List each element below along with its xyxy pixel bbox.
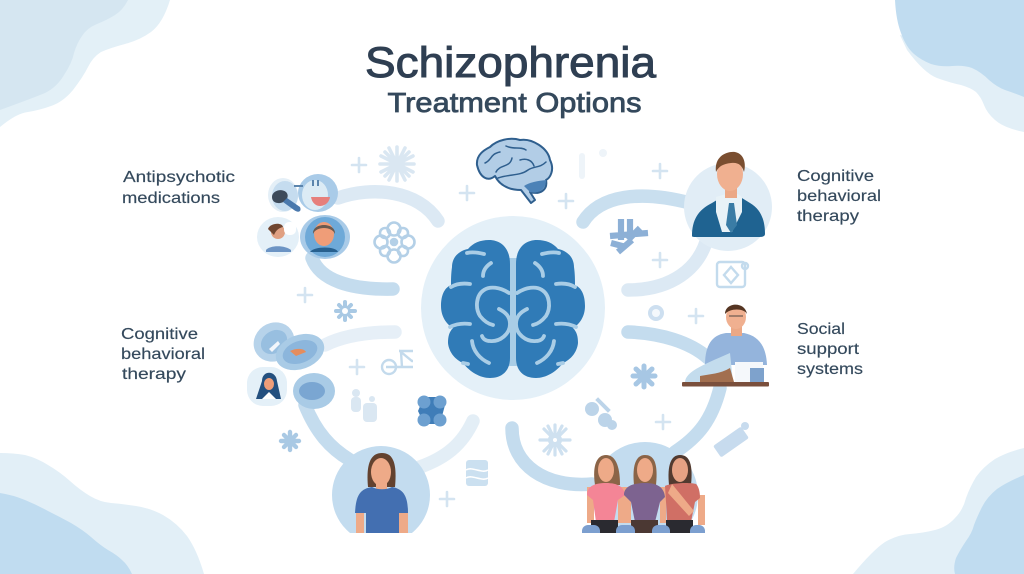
connector arcs (305, 192, 720, 484)
background blob: top right (895, 0, 1024, 132)
icon: top right faint figure (579, 149, 607, 179)
people: support group (582, 442, 705, 533)
icon: gear small left (336, 302, 355, 320)
icon: flower right (633, 366, 655, 387)
label: cognitive behavioral therapy left: therapy (122, 366, 186, 383)
background blob: top left (0, 0, 170, 127)
person: man at desk with book (682, 305, 769, 386)
icon: top brain (477, 139, 552, 203)
background blob: bottom right (853, 448, 1024, 574)
icon: jar (466, 460, 488, 486)
label: social support systems: support (797, 341, 860, 358)
subtitle: Treatment Options (388, 87, 642, 118)
plus signs (298, 158, 703, 506)
icon cluster: medications (257, 174, 350, 259)
label: social support systems: systems (797, 361, 863, 378)
icon: dumbbell figure (585, 397, 617, 430)
icon: small round (648, 305, 664, 321)
person: man in suit (684, 152, 772, 251)
label: antipsychotic medications: Antipsychotic (123, 169, 235, 186)
icon: small flower (281, 432, 299, 450)
icon: capsule device (713, 422, 749, 457)
label: cognitive behavioral therapy right: therapy (797, 208, 859, 225)
label: social support systems: Social (797, 321, 845, 338)
icon: blue cross (418, 396, 446, 426)
icon cluster: therapy left (246, 314, 335, 409)
label: antipsychotic medications: medications (122, 190, 220, 207)
label: cognitive behavioral therapy right: behavioral (797, 188, 881, 205)
icon: virus (540, 425, 570, 455)
label: cognitive behavioral therapy left: behavioral (121, 346, 205, 363)
person: woman (332, 446, 430, 533)
icon: medical box (717, 262, 748, 287)
label: cognitive behavioral therapy left: Cognitive (121, 326, 198, 343)
icon: blue gear right (610, 219, 648, 252)
icon: figures (351, 389, 377, 422)
icon: snowflake (380, 147, 414, 181)
background blob: bottom left (0, 453, 204, 574)
label: cognitive behavioral therapy right: Cognitive (797, 168, 874, 185)
central brain (421, 216, 605, 400)
title: Schizophrenia (365, 39, 656, 87)
icon: bicycle-like diagram (382, 351, 413, 374)
icon: ring cluster (374, 222, 414, 262)
